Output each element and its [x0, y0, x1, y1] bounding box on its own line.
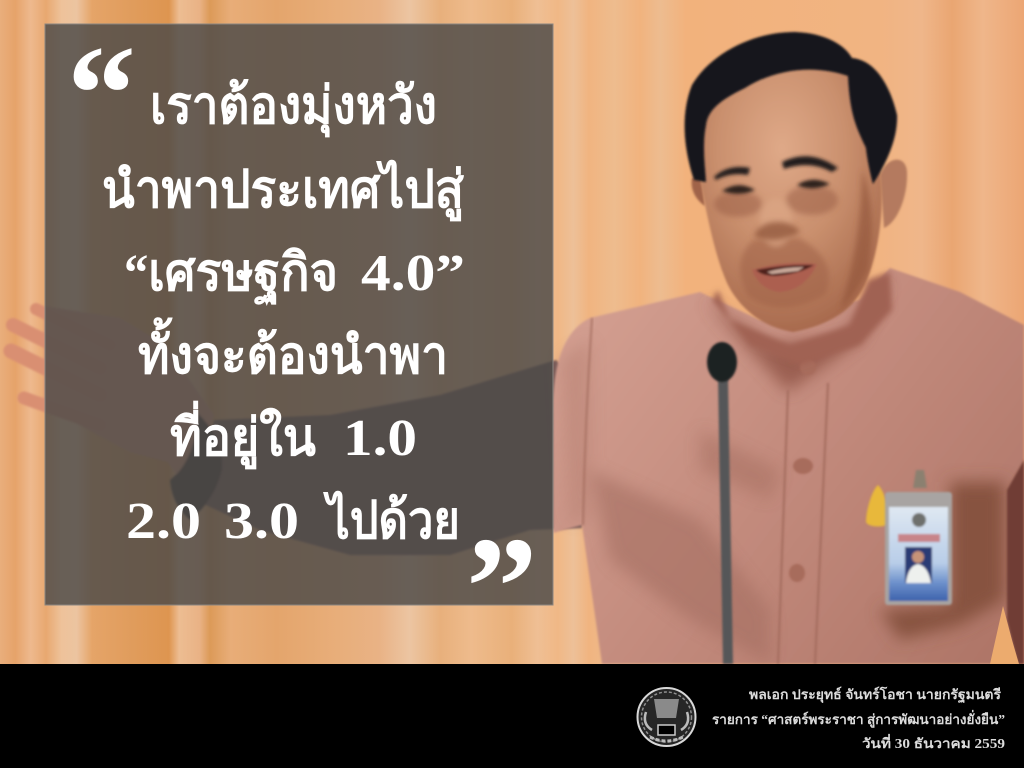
- quote line 6: 2.0: [126, 493, 201, 550]
- eyes: [722, 180, 830, 194]
- ID card: [885, 492, 952, 605]
- nose: [754, 222, 800, 240]
- quote line 3: 4.0”: [361, 245, 465, 302]
- footer caption: [712, 685, 1005, 751]
- quote line 5: ที่อยู่ใน: [170, 401, 316, 470]
- quote text: [67, 17, 538, 666]
- programme name: รายการ “ศาสตร์พระราชา สู่การพัฒนาอย่างยั่งยืน”: [712, 709, 1005, 728]
- closing quotation mark: ”: [466, 508, 538, 666]
- torso and shirt: [553, 268, 1024, 664]
- quote line 5: [170, 401, 417, 470]
- quote line 6: [126, 490, 460, 550]
- hand and raised arm: [11, 306, 600, 555]
- opening quotation mark: “: [67, 17, 136, 170]
- quote line 3: [124, 245, 465, 306]
- quote line 6: 3.0: [224, 493, 299, 550]
- quote line 6: ไปด้วย: [323, 490, 460, 550]
- quote line 2: นำพาประเทศไปสู่: [102, 159, 464, 222]
- microphone: [707, 342, 737, 664]
- lanyard clip: [913, 470, 927, 488]
- shirt placket: [778, 383, 828, 664]
- face: [700, 62, 882, 332]
- eyebrows: [714, 156, 838, 180]
- quote line 4: ทั้งจะต้องนำพา: [138, 317, 448, 385]
- icon: government seal: [638, 688, 696, 746]
- quote line 3: “เศรษฐกิจ: [124, 245, 338, 306]
- shirt buttons: [789, 359, 816, 582]
- panel: quote background: [45, 24, 553, 605]
- curtain gap at right: [990, 606, 1019, 664]
- shirt shading: [560, 280, 890, 664]
- quote line 1: เราต้องมุ่งหวัง: [150, 78, 437, 138]
- hair: [685, 32, 897, 184]
- mouth: [752, 263, 817, 292]
- yellow pin badge: [866, 485, 890, 526]
- quote line 5: 1.0: [343, 410, 417, 467]
- facial shading: [714, 170, 872, 310]
- shirt pocket shadow: [880, 482, 1005, 640]
- footer bar: [0, 664, 1024, 768]
- neck: [712, 272, 892, 365]
- date: วันที่ 30 ธันวาคม 2559: [862, 733, 1005, 751]
- speaker name: พลเอก ประยุทธ์ จันทร์โอชา นายกรัฐมนตรี: [749, 685, 1002, 704]
- ears: [880, 160, 907, 228]
- sleeve crease: [583, 318, 592, 525]
